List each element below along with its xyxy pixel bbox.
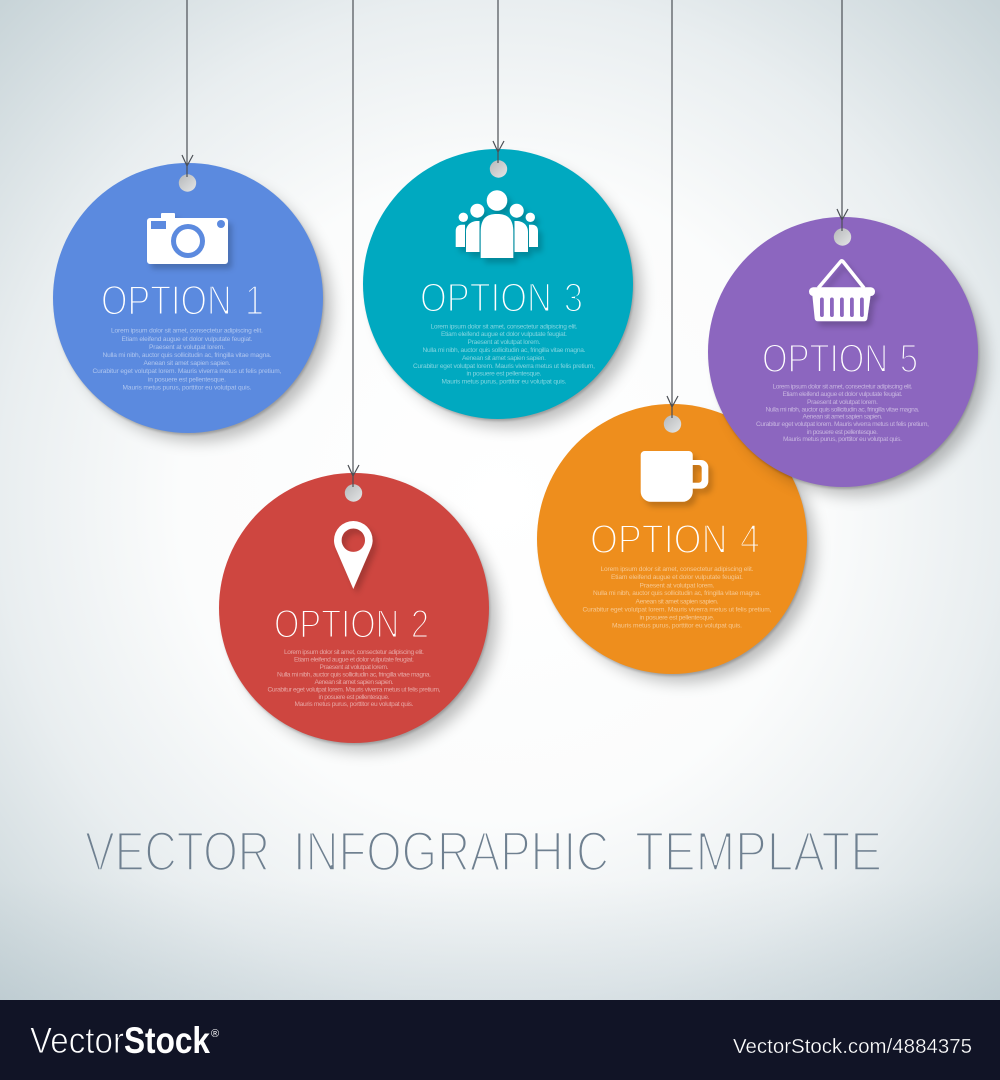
- text block: in posuere est pellentesque.: [148, 376, 226, 383]
- text block: Curabitur eget volutpat lorem. Mauris viverra metus ut felis pretium,: [413, 363, 595, 370]
- hanging string and eyelet: [345, 0, 362, 502]
- text block: Etiam eleifend augue et dolor vulputate feugiat.: [122, 336, 253, 343]
- tag circle: [53, 163, 323, 433]
- text block: [268, 649, 441, 708]
- text block: Mauris metus purus, porttitor eu volutpat quis.: [122, 384, 252, 391]
- text block: in posuere est pellentesque.: [318, 694, 390, 701]
- text block: Etiam eleifend augue et dolor vulputate feugiat.: [782, 391, 903, 398]
- tag shadow: [364, 151, 641, 427]
- text block: in posuere est pellentesque.: [640, 614, 715, 621]
- text block: Praesent at volutpat lorem.: [149, 344, 225, 351]
- heading: OPTION 5: [762, 337, 918, 381]
- title: INFOGRAPHIC: [293, 819, 609, 882]
- footer logo: [30, 1020, 219, 1061]
- text block: Praesent at volutpat lorem.: [807, 399, 878, 406]
- tag shadow: [538, 406, 815, 682]
- panel: option 5: [708, 0, 986, 495]
- text block: Aenean sit amet sapien sapien.: [462, 355, 546, 362]
- footer bar: [0, 1000, 1000, 1080]
- text block: Nulla mi nibh, auctor quis sollicitudin ac, fringilla vitae magna.: [277, 672, 431, 679]
- text block: Mauris metus purus, porttitor eu volutpat quis.: [442, 378, 567, 385]
- text block: Curabitur eget volutpat lorem. Mauris viverra metus ut felis pretium,: [582, 607, 772, 614]
- text block: Curabitur eget volutpat lorem. Mauris viverra metus ut felis pretium,: [92, 368, 282, 375]
- icon: basket: [809, 261, 875, 321]
- tag circle: [363, 149, 633, 419]
- footer logo: Stock: [124, 1020, 210, 1061]
- footer logo: Vector: [30, 1020, 124, 1061]
- hanging string and eyelet: [179, 0, 196, 192]
- panel: option 4: [537, 0, 815, 682]
- icon: camera: [147, 213, 228, 264]
- text block: Mauris metus purus, porttitor eu volutpat quis.: [612, 623, 742, 630]
- text block: Aenean sit amet sapien sapien.: [144, 360, 231, 367]
- text block: Curabitur eget volutpat lorem. Mauris viverra metus ut felis pretium,: [756, 421, 929, 428]
- text block: Nulla mi nibh, auctor quis sollicitudin ac, fringilla vitae magna.: [593, 590, 761, 597]
- text block: Etiam eleifend augue et dolor vulputate feugiat.: [441, 331, 567, 338]
- panel: option 1: [53, 0, 331, 441]
- heading: OPTION 2: [274, 602, 429, 646]
- text block: Lorem ipsum dolor sit amet, consectetur adipiscing elit.: [111, 328, 263, 335]
- text block: Nulla mi nibh, auctor quis sollicitudin ac, fringilla vitae magna.: [766, 406, 920, 413]
- tag shadow: [220, 475, 497, 751]
- text block: [756, 384, 929, 443]
- icon: mug: [641, 451, 708, 502]
- heading: OPTION 3: [420, 274, 583, 320]
- title: [85, 819, 882, 882]
- text block: Mauris metus purus, porttitor eu volutpat quis.: [783, 436, 902, 443]
- text block: Praesent at volutpat lorem.: [320, 664, 389, 671]
- text block: in posuere est pellentesque.: [466, 371, 542, 378]
- text block: Etiam eleifend augue et dolor vulputate feugiat.: [294, 656, 414, 664]
- hanging string and eyelet: [834, 0, 851, 246]
- text block: [582, 566, 772, 630]
- text block: Lorem ipsum dolor sit amet, consectetur adipiscing elit.: [772, 384, 913, 390]
- icon: people group: [456, 190, 538, 258]
- text block: Aenean sit amet sapien sapien.: [636, 598, 719, 605]
- heading: OPTION 4: [590, 516, 760, 562]
- text block: Lorem ipsum dolor sit amet, consectetur adipiscing elit.: [430, 324, 578, 330]
- text block: Nulla mi nibh, auctor quis sollicitudin ac, fringilla vitae magna.: [102, 352, 272, 359]
- footer url: VectorStock.com/4884375: [733, 1036, 972, 1058]
- text block: [92, 328, 282, 391]
- tag circle: [708, 217, 978, 487]
- hanging string and eyelet: [490, 0, 507, 178]
- text block: Curabitur eget volutpat lorem. Mauris viverra metus ut felis pretium,: [268, 686, 441, 693]
- text block: Etiam eleifend augue et dolor vulputate feugiat.: [611, 574, 743, 581]
- text block: [413, 324, 595, 385]
- panel: option 2: [219, 0, 497, 751]
- title: TEMPLATE: [635, 819, 882, 882]
- text block: Aenean sit amet sapien sapien.: [314, 679, 394, 686]
- tag circle: [537, 404, 807, 674]
- footer logo: ®: [211, 1028, 219, 1040]
- tag shadow: [709, 219, 986, 495]
- text block: Praesent at volutpat lorem.: [640, 582, 715, 590]
- tag shadow: [54, 165, 331, 441]
- tag circle: [219, 473, 489, 743]
- title: VECTOR: [85, 819, 270, 882]
- text block: Lorem ipsum dolor sit amet, consectetur adipiscing elit.: [284, 649, 424, 656]
- icon: map pin: [334, 521, 373, 589]
- hanging string and eyelet: [664, 0, 681, 433]
- heading: OPTION 1: [101, 276, 264, 324]
- text block: Aenean sit amet sapien sapien.: [802, 414, 883, 420]
- panel: option 3: [363, 0, 641, 427]
- text block: Nulla mi nibh, auctor quis sollicitudin ac, fringilla vitae magna.: [422, 347, 586, 354]
- text block: Praesent at volutpat lorem.: [468, 339, 541, 346]
- text block: in posuere est pellentesque.: [807, 429, 878, 436]
- text block: Mauris metus purus, porttitor eu volutpat quis.: [294, 701, 414, 708]
- text block: Lorem ipsum dolor sit amet, consectetur adipiscing elit.: [600, 566, 754, 573]
